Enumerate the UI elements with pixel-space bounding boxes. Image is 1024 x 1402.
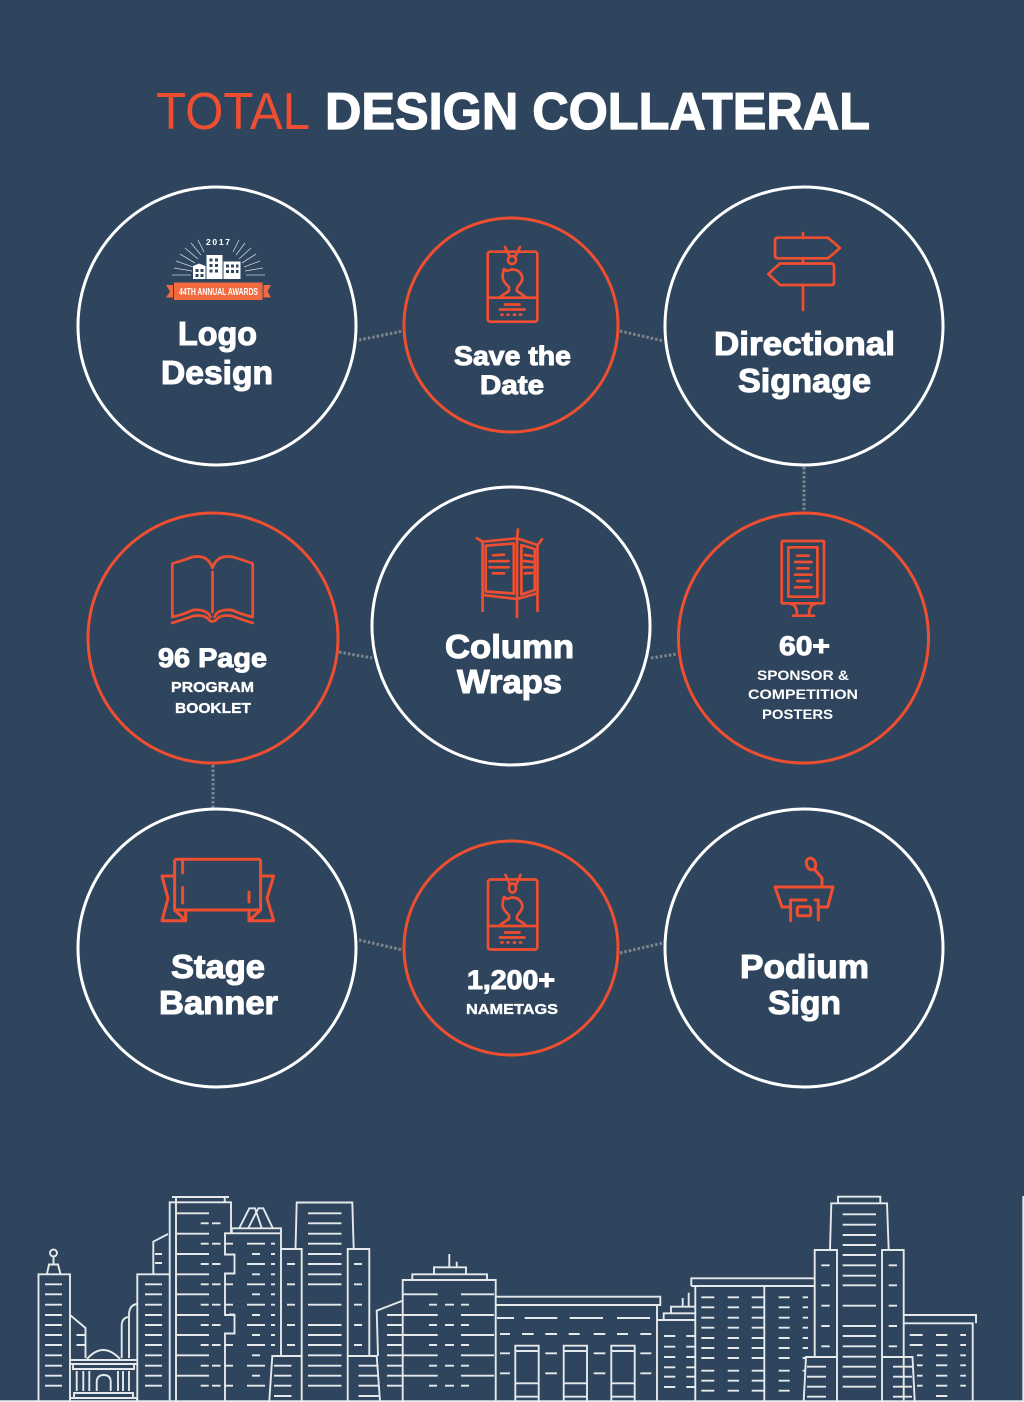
icon: column wrap: [477, 530, 542, 617]
label: Design: [161, 354, 273, 391]
label: NAMETAGS: [466, 1001, 558, 1018]
label: Save the: [454, 341, 571, 371]
icon: open book: [172, 556, 253, 623]
label: 60+: [779, 631, 830, 661]
panel: program booklet: [88, 513, 338, 763]
label: PROGRAM: [171, 679, 254, 696]
title: DESIGN COLLATERAL: [325, 83, 870, 141]
label: POSTERS: [762, 706, 833, 722]
city skyline: [0, 1196, 1024, 1402]
icon: awards logo: [166, 237, 271, 300]
icon: awards logo: 2017: [206, 237, 231, 247]
label: Directional: [714, 325, 895, 362]
label: Podium: [740, 948, 869, 985]
label: [158, 643, 267, 717]
dotted connectors: [213, 331, 804, 953]
label: [445, 628, 574, 700]
panel: column wraps: [372, 487, 650, 765]
label: 96 Page: [158, 643, 267, 673]
label: Signage: [738, 362, 871, 399]
panel: directional signage: [665, 187, 943, 465]
label: Column: [445, 628, 574, 665]
label: Sign: [768, 984, 841, 1021]
label: [714, 325, 895, 399]
icon: awards logo: 44TH ANNUAL AWARDS: [179, 287, 258, 298]
label: Stage: [171, 948, 265, 985]
label: Logo: [178, 315, 257, 352]
label: [161, 315, 273, 391]
label: [466, 965, 558, 1018]
panel: podium sign: [665, 809, 943, 1087]
label: [159, 948, 278, 1021]
panel: stage banner: [78, 809, 356, 1087]
panel: nametags: [404, 841, 618, 1055]
label: COMPETITION: [748, 686, 858, 702]
label: [740, 948, 869, 1021]
icon: poster stand: [782, 541, 824, 616]
panel: save the date: [404, 218, 618, 432]
icon: podium: [775, 857, 833, 921]
label: 1,200+: [467, 965, 555, 995]
label: Date: [480, 370, 544, 400]
label: Wraps: [457, 663, 562, 700]
panel: sponsor posters: [678, 513, 928, 763]
label: [748, 631, 858, 722]
title: TOTAL: [156, 83, 310, 141]
icon: nametag: [488, 875, 537, 950]
panel: logo design: [78, 187, 356, 465]
label: Banner: [159, 984, 278, 1021]
label: [454, 341, 571, 400]
icon: badge: [488, 247, 537, 322]
label: BOOKLET: [175, 700, 251, 717]
icon: signpost: [768, 233, 840, 310]
label: SPONSOR &: [757, 667, 849, 683]
icon: banner: [162, 859, 274, 921]
